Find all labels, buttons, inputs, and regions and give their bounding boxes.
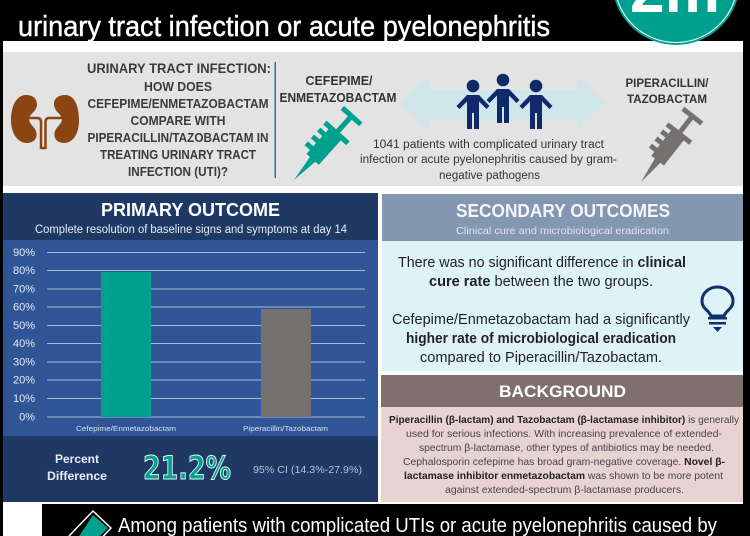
heading: research question [87, 60, 271, 179]
text: background body: Piperacillin (β-lactam) and Tazobactam (β-lactamase inhibitor) is generally [389, 415, 740, 426]
label: piperacillin/tazobactam arm: PIPERACILLIN/ [626, 76, 709, 90]
panel: study question and design [3, 52, 743, 191]
heading: secondary outcomes [456, 201, 670, 237]
bar: cefepime/enmetazobactam [101, 272, 151, 417]
text: secondary findings: higher rate of microbiological eradication [406, 330, 676, 347]
axis labels: 30% [13, 356, 35, 368]
label: cefepime/enmetazobactam arm: CEFEPIME/ [306, 73, 373, 88]
axis labels: 20% [13, 374, 35, 386]
icon: teal syringe [283, 104, 365, 190]
stat: percent difference: Percent [55, 452, 99, 466]
panel: conclusion banner [42, 504, 750, 536]
text: population [360, 139, 617, 182]
text: secondary findings: compared to Piperacillin/Tazobactam. [420, 349, 662, 366]
icon: diamond [69, 511, 111, 536]
heading: secondary outcomes: Clinical cure and microbiological eradication [456, 226, 669, 237]
text: secondary findings: There was no significant difference in clinical [398, 254, 686, 271]
category labels: Piperacillin/Tazobactam [243, 424, 328, 433]
category labels: Cefepime/Enmetazobactam [76, 424, 176, 433]
text: population: 1041 patients with complicated urinary tract [373, 139, 605, 151]
label: cefepime/enmetazobactam arm: ENMETAZOBACTAM [280, 90, 396, 105]
text: background body: lactamase inhibitor enmetazobactam was shown to be more potent [404, 471, 723, 482]
axis labels: 10% [13, 393, 35, 405]
heading: background: BACKGROUND [499, 382, 626, 401]
text: secondary findings: cure rate between the two groups. [429, 273, 653, 290]
label: cefepime/enmetazobactam arm [280, 73, 396, 105]
axis labels: 50% [13, 320, 35, 332]
axis labels: 60% [13, 302, 35, 314]
heading: research question: COMPARE WITH [130, 113, 226, 128]
stat: percent difference: 95% CI (14.3%-27.9%) [253, 464, 362, 476]
heading: research question: HOW DOES [144, 79, 212, 94]
icon: 2m logo badge [612, 0, 740, 45]
bar: piperacillin/tazobactam [261, 309, 311, 417]
stat: percent difference [47, 449, 362, 487]
icon: lightbulb [702, 287, 733, 332]
icon: kidneys [11, 95, 79, 149]
panel: background [381, 375, 743, 502]
axis labels [13, 247, 35, 424]
axis labels: 90% [13, 247, 35, 259]
heading: research question: PIPERACILLIN/TAZOBACTAM IN [88, 130, 268, 145]
bar chart [13, 247, 365, 433]
text: background body: against extended-spectrum β-lactamase producers. [445, 485, 684, 496]
text: background body: used for serious infections. With increasing prevalence of extended- [406, 429, 722, 440]
heading: primary outcome: Complete resolution of baseline signs and symptoms at day 14 [35, 224, 348, 236]
text: background body: Cephalosporin cefepime has broad gram-negative coverage. Novel β- [403, 457, 725, 468]
heading: research question: INFECTION (UTI)? [128, 164, 228, 179]
heading: secondary outcomes: SECONDARY OUTCOMES [456, 201, 670, 221]
text: population: infection or acute pyelonephritis caused by gram- [360, 154, 617, 166]
panel: secondary outcomes [382, 194, 743, 371]
axis labels: 70% [13, 284, 35, 296]
label: piperacillin/tazobactam arm: TAZOBACTAM [627, 92, 707, 106]
axis labels: 40% [13, 338, 35, 350]
stat: percent difference: Difference [47, 469, 107, 483]
icon: gray syringe [629, 105, 706, 191]
heading: research question: CEFEPIME/ENMETAZOBACTAM [88, 96, 268, 111]
icon: patients [456, 74, 552, 129]
text: background body: spectrum β-lactamase, other types of antibiotics may be needed. [419, 443, 714, 454]
axis labels: 0% [19, 412, 35, 424]
category labels [76, 424, 328, 433]
heading: primary outcome: PRIMARY OUTCOME [101, 200, 280, 220]
text: secondary findings: Cefepime/Enmetazobactam had a significantly [392, 311, 690, 328]
heading: primary outcome [35, 200, 348, 236]
text: background body [389, 415, 740, 496]
text: secondary findings [392, 254, 690, 366]
heading: research question: TREATING URINARY TRACT [100, 147, 256, 162]
title: urinary tract infection or acute pyelonephritis [18, 11, 550, 43]
stat: percent difference: 21.2% [143, 449, 231, 487]
axis labels: 80% [13, 265, 35, 277]
panel: primary outcome [3, 193, 378, 502]
heading: research question: URINARY TRACT INFECTION: [87, 60, 271, 76]
label: piperacillin/tazobactam arm [626, 76, 709, 106]
arrow: two-way comparison [400, 76, 605, 131]
text: population: negative pathogens [439, 170, 540, 182]
